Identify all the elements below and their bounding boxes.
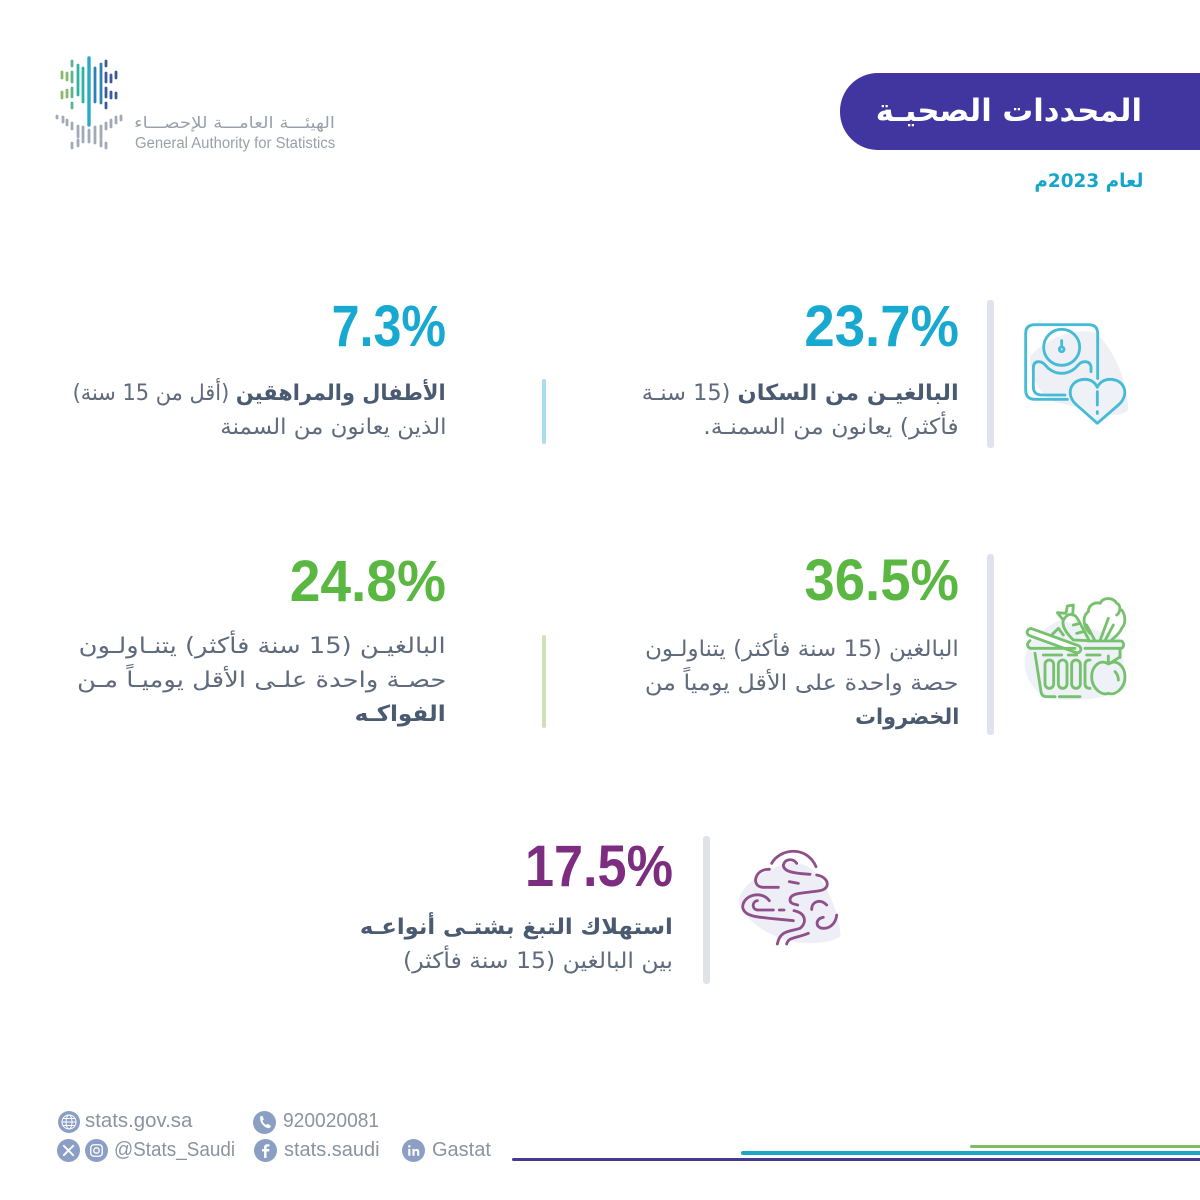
value: 17.5% [525, 834, 673, 899]
logo: General Authority for Statistics [56, 56, 335, 152]
phone number: 920020081 [283, 1110, 379, 1132]
icon: linkedin [402, 1139, 425, 1162]
website: stats.gov.sa [85, 1110, 192, 1132]
social handle: @Stats_Saudi [114, 1139, 235, 1161]
description line 3: الفواكـه [355, 702, 446, 727]
icon: smoke [738, 850, 840, 946]
linkedin name: Gastat [432, 1139, 491, 1161]
description line 2: الذين يعانون من السمنة [220, 415, 446, 440]
divider [703, 836, 710, 984]
description: البالغين (15 سنة فأكثر) يتناولـون [645, 637, 959, 662]
logo English name: General Authority for Statistics [135, 135, 335, 152]
description line 2: حصـة واحدة علـى الأقل يوميـاً مـن [77, 668, 446, 693]
purple line [512, 1158, 1200, 1161]
value: 36.5% [804, 548, 959, 613]
blue line [741, 1151, 1200, 1155]
icon: basket of vegetables [1024, 597, 1126, 700]
stat: vegetables [645, 548, 1126, 735]
description: البالغيـن من السكان (15 سنـة [642, 381, 959, 406]
divider [987, 300, 994, 448]
value: 23.7% [804, 294, 959, 359]
description line 2: حصة واحدة على الأقل يومياً من [645, 671, 959, 696]
icon: phone [253, 1111, 276, 1134]
icon: web [58, 1111, 80, 1133]
stat: children obesity [73, 294, 546, 444]
value: 24.8% [290, 549, 446, 614]
description: استهلاك التبغ بشتـى أنواعـه [360, 915, 673, 940]
title: المحددات الصحيـة [876, 93, 1142, 129]
icon: facebook [254, 1139, 277, 1162]
divider [542, 635, 546, 728]
value: 7.3% [332, 294, 446, 359]
description line 2: بين البالغين (15 سنة فأكثر) [403, 949, 673, 974]
footer contacts [57, 1110, 491, 1162]
stat: tobacco [360, 834, 840, 984]
divider [987, 554, 994, 735]
icon: X [57, 1139, 80, 1162]
icon: scale and heart [1024, 323, 1128, 425]
footer accent lines [512, 1145, 1200, 1161]
logo Arabic name: الهيئـــة العامـــة للإحصـــاء [134, 113, 335, 132]
description line 3: الخضروات [855, 705, 959, 730]
stat: adults obesity [642, 294, 1128, 448]
green line [970, 1145, 1200, 1148]
title banner [840, 73, 1200, 150]
stat: fruits [77, 549, 546, 728]
description: البالغيـن (15 سنة فأكثر) يتنـاولـون [79, 634, 446, 659]
facebook name: stats.saudi [284, 1139, 380, 1161]
description: الأطفال والمراهقين (أقل من 15 سنة) [73, 381, 446, 406]
divider [542, 379, 546, 444]
subtitle: year: لعام 2023م [1034, 170, 1143, 192]
logo mark [56, 56, 122, 150]
icon: instagram [85, 1139, 108, 1162]
description line 2: فأكثر) يعانون من السمنـة. [704, 415, 959, 440]
